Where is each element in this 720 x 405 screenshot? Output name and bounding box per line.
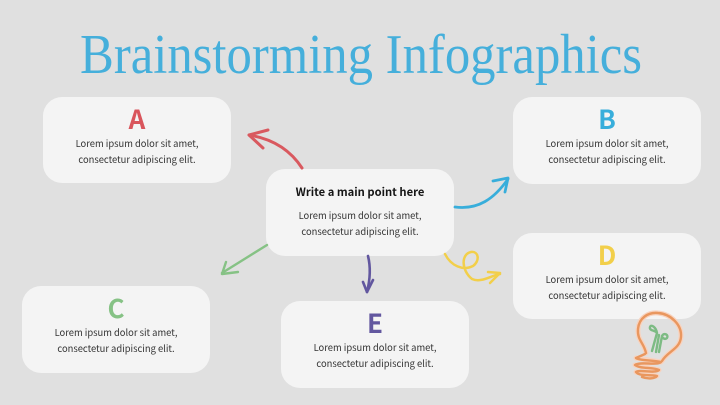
arrow: red to A — [249, 130, 302, 168]
arrow: green to C — [222, 245, 267, 274]
text block E: consectetur adipiscing elit. — [316, 356, 434, 370]
letter B: B — [598, 100, 616, 137]
text block E — [314, 340, 436, 370]
letter A: A — [129, 100, 145, 137]
letter D: D — [598, 236, 616, 273]
text block B — [546, 136, 668, 166]
text block B: Lorem ipsum dolor sit amet, — [546, 136, 668, 150]
main point text — [299, 208, 421, 238]
panel: D — [513, 233, 701, 319]
arrow: blue to B — [455, 178, 508, 207]
text block E: Lorem ipsum dolor sit amet, — [314, 340, 436, 354]
icon: light bulb — [635, 313, 681, 378]
text block A: Lorem ipsum dolor sit amet, — [76, 136, 198, 150]
text block A — [76, 136, 198, 166]
arrow: purple to E — [363, 256, 373, 292]
arrow: yellow to D — [445, 252, 500, 283]
panel: A — [43, 97, 231, 183]
text block A: consectetur adipiscing elit. — [78, 152, 196, 166]
text block C — [55, 325, 177, 355]
text block D: Lorem ipsum dolor sit amet, — [546, 272, 668, 286]
letter C: C — [107, 289, 125, 326]
main point text: Lorem ipsum dolor sit amet, — [299, 208, 421, 222]
main point text: consectetur adipiscing elit. — [301, 224, 419, 238]
panel: E — [281, 301, 469, 388]
letter E: E — [367, 304, 383, 341]
main point heading: Write a main point here — [296, 184, 424, 200]
text block B: consectetur adipiscing elit. — [548, 152, 666, 166]
panel: main point — [266, 169, 454, 256]
title: Brainstorming Infographics — [80, 24, 642, 86]
text block D — [546, 272, 668, 302]
text block C: consectetur adipiscing elit. — [57, 341, 175, 355]
text block D: consectetur adipiscing elit. — [548, 288, 666, 302]
panel: C — [22, 286, 210, 373]
text block C: Lorem ipsum dolor sit amet, — [55, 325, 177, 339]
panel: B — [513, 97, 701, 184]
